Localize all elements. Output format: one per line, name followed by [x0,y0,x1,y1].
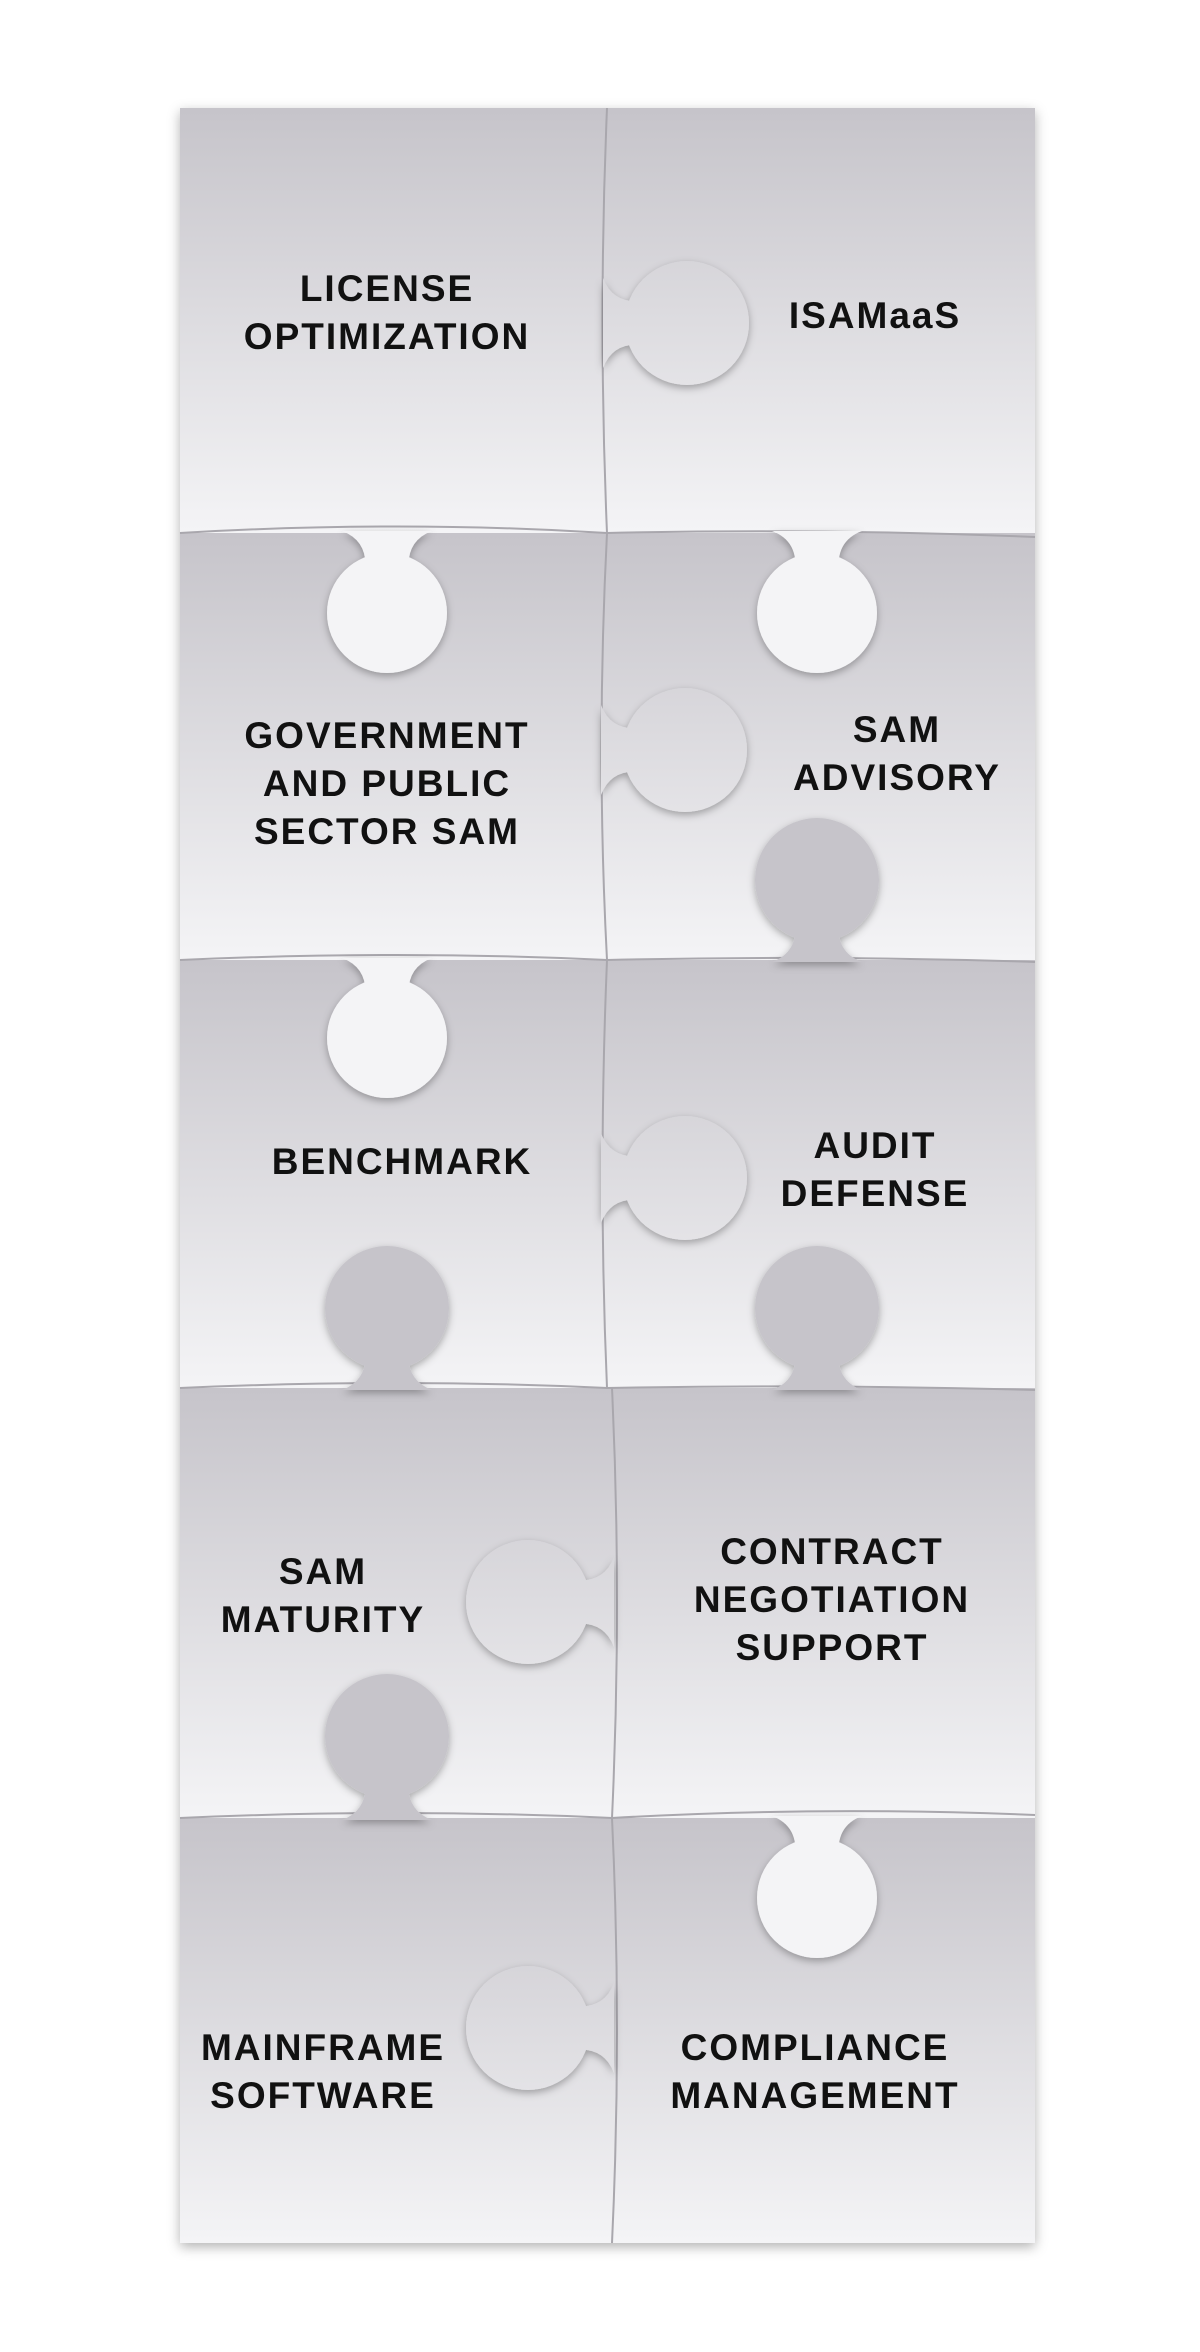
label: compliance management: MANAGEMENT [670,2075,960,2116]
knob: row3 into row2 [755,818,879,962]
label: SAM advisory [793,709,1001,798]
hole: row5 top right [757,1816,877,1958]
holes: row2 top [327,531,877,673]
label: government and public sector SAM [244,715,530,852]
label: benchmark: BENCHMARK [272,1141,532,1182]
label: contract negotiation support: NEGOTIATION [694,1579,970,1620]
hole: row3 top [327,958,447,1098]
label: contract negotiation support: CONTRACT [720,1531,944,1572]
label: government and public sector SAM: GOVERNMENT [244,715,530,756]
label: compliance management: COMPLIANCE [681,2027,949,2068]
label: contract negotiation support [694,1531,970,1668]
label: license optimization: LICENSE [300,268,474,309]
knob: row5 left [466,1966,614,2090]
label: SAM advisory: SAM [853,709,941,750]
label: mainframe software: SOFTWARE [210,2075,436,2116]
knob: row5 into row4 [325,1674,449,1820]
label: audit defense: AUDIT [813,1125,937,1166]
puzzle board [180,108,1035,2243]
knobs [325,261,879,2090]
knob: row1 right [603,261,749,385]
label: mainframe software [201,2027,445,2116]
label: SAM maturity [221,1551,425,1640]
label: license optimization: OPTIMIZATION [244,316,530,357]
label: audit defense: DEFENSE [781,1173,969,1214]
label: SAM advisory: ADVISORY [793,757,1001,798]
label: mainframe software: MAINFRAME [201,2027,445,2068]
label: SAM maturity: MATURITY [221,1599,425,1640]
label: license optimization [244,268,530,357]
label: government and public sector SAM: AND PUBLIC [263,763,511,804]
label: audit defense [781,1125,969,1214]
label: contract negotiation support: SUPPORT [736,1627,928,1668]
knob: row3 right [601,1116,747,1240]
knob: row2 right [601,688,747,812]
label: SAM maturity: SAM [279,1551,367,1592]
knobs: row4 into row3 [325,1246,879,1390]
label: compliance management [670,2027,960,2116]
label: ISAMaaS: ISAMaaS [789,295,961,336]
label: government and public sector SAM: SECTOR SAM [254,811,520,852]
knob: row4 left [466,1540,614,1664]
